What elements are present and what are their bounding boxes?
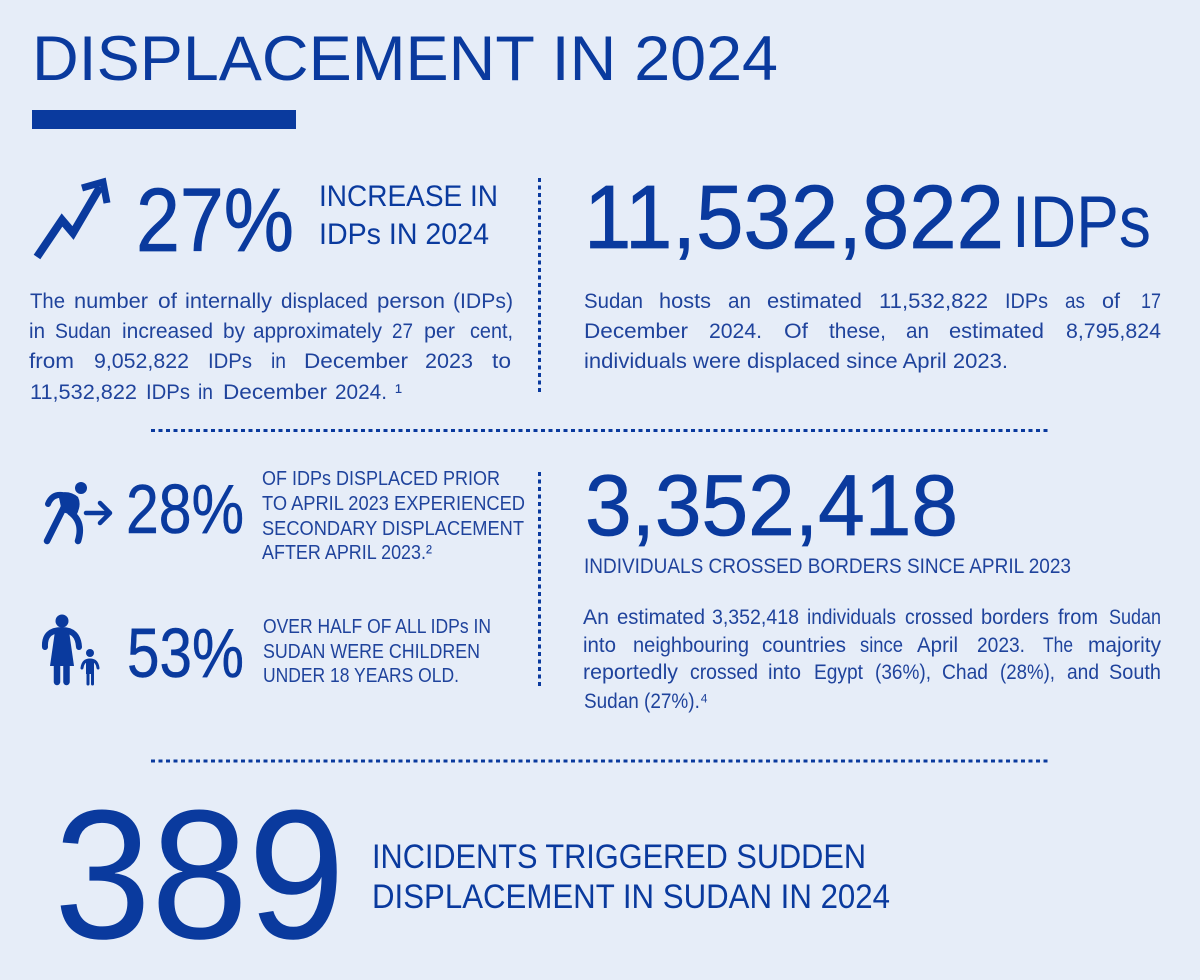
panel: border crossings bbox=[583, 458, 1161, 713]
text block: IDP increase: 27 bbox=[392, 320, 413, 343]
text block: IDP increase: ¹ bbox=[395, 381, 402, 404]
stat label: TO APRIL 2023 EXPERIENCED bbox=[262, 493, 525, 515]
text block: IDPs hosted: 8,795,824 bbox=[1066, 320, 1161, 343]
text block: IDP increase: in bbox=[271, 350, 286, 373]
panel: 53% children bbox=[45, 614, 491, 692]
text block: IDP increase: by bbox=[223, 320, 245, 343]
stat label: UNDER 18 YEARS OLD. bbox=[263, 665, 459, 687]
text block: IDP increase: number bbox=[74, 290, 148, 313]
stat: 53%: 53% bbox=[127, 614, 244, 692]
text block: border crossings: The bbox=[1043, 634, 1073, 657]
stat label: DISPLACEMENT IN SUDAN IN 2024 bbox=[372, 878, 890, 916]
stat label: IDPs IN 2024 bbox=[319, 218, 489, 251]
text block: IDPs hosted: individuals were displaced since April 2023. bbox=[584, 350, 1008, 373]
stat: 27%: 27% bbox=[136, 171, 294, 271]
text block: IDPs hosted: an bbox=[728, 290, 751, 313]
stat: 389: 389 bbox=[54, 771, 345, 977]
text block: IDP increase: 2023 bbox=[425, 350, 473, 373]
stat label: AFTER APRIL 2023.² bbox=[262, 542, 432, 564]
text block: IDP increase: December bbox=[223, 381, 327, 404]
text block: border crossings: estimated bbox=[617, 606, 705, 629]
icon: rising arrow bbox=[37, 182, 107, 257]
stat label bbox=[372, 838, 890, 916]
text block: border crossings: majority bbox=[1088, 634, 1161, 657]
text block: border crossings: individuals bbox=[807, 606, 896, 629]
text block: IDPs hosted: an bbox=[906, 320, 929, 343]
text block: IDP increase: in bbox=[198, 381, 213, 404]
panel: incidents bbox=[54, 771, 890, 977]
text block: IDPs hosted: 11,532,822 bbox=[879, 290, 988, 313]
text block: IDPs hosted: IDPs bbox=[1005, 290, 1048, 313]
text block: IDP increase bbox=[29, 290, 513, 404]
stat label bbox=[263, 616, 491, 687]
text block: IDPs hosted: estimated bbox=[949, 320, 1044, 343]
text block: border crossings: from bbox=[1058, 606, 1098, 629]
stat unit: IDPs: IDPs bbox=[1012, 182, 1151, 263]
text block: IDPs hosted bbox=[584, 290, 1161, 373]
text block: border crossings: into bbox=[583, 634, 616, 657]
stat label: INDIVIDUALS CROSSED BORDERS SINCE APRIL 2023 bbox=[584, 555, 1071, 578]
text block: IDP increase: to bbox=[492, 350, 511, 373]
text block: IDPs hosted: Of bbox=[784, 320, 808, 343]
text block: IDP increase: per bbox=[424, 320, 455, 343]
stat label: SECONDARY DISPLACEMENT bbox=[262, 518, 524, 540]
stat: 28%: 28% bbox=[126, 470, 244, 548]
text block: IDP increase: Sudan bbox=[55, 320, 111, 343]
text block: IDPs hosted: hosts bbox=[659, 290, 711, 313]
panel: 28% secondary displacement bbox=[47, 468, 525, 564]
text block: border crossings: crossed bbox=[690, 661, 758, 684]
text block: IDPs hosted: estimated bbox=[767, 290, 862, 313]
text block: border crossings bbox=[583, 606, 1161, 713]
text block: IDPs hosted: 17 bbox=[1141, 290, 1161, 313]
stat label: INCREASE IN bbox=[319, 180, 498, 213]
text block: border crossings: (36%), bbox=[875, 661, 931, 684]
stat label bbox=[262, 468, 525, 564]
text block: border crossings: borders bbox=[981, 606, 1049, 629]
stat: 3,352,418: 3,352,418 bbox=[585, 458, 958, 554]
text block: IDP increase: in bbox=[29, 320, 45, 343]
text block: border crossings: reportedly bbox=[583, 661, 679, 684]
panel: 27% increase bbox=[29, 171, 513, 404]
text block: IDP increase: IDPs bbox=[146, 381, 190, 404]
text block: IDPs hosted: of bbox=[1102, 290, 1120, 313]
text block: IDP increase: IDPs bbox=[208, 350, 252, 373]
text block: IDP increase: December bbox=[304, 350, 408, 373]
icon: adult and child bbox=[45, 614, 98, 684]
text block: border crossings: 2023. bbox=[977, 634, 1025, 657]
stat label bbox=[319, 180, 498, 251]
text block: border crossings: Chad bbox=[942, 661, 988, 684]
text block: border crossings: countries bbox=[762, 634, 846, 657]
text block: IDP increase: 9,052,822 bbox=[94, 350, 189, 373]
text block: IDPs hosted: December bbox=[584, 320, 688, 343]
text block: IDPs hosted: these, bbox=[829, 320, 886, 343]
text block: IDP increase: person bbox=[377, 290, 445, 313]
text block: IDP increase: 2024. bbox=[335, 381, 387, 404]
text block: IDP increase: cent, bbox=[470, 320, 513, 343]
icon: running person with arrow bbox=[47, 482, 110, 541]
text block: IDP increase: displaced bbox=[281, 290, 368, 313]
text block: IDP increase: internally bbox=[185, 290, 273, 313]
text block: border crossings: crossed bbox=[905, 606, 973, 629]
text block: border crossings: since bbox=[860, 634, 903, 657]
text block: IDP increase: of bbox=[158, 290, 177, 313]
vertical divider top bbox=[538, 178, 541, 392]
horizontal divider 1 bbox=[151, 429, 1049, 432]
text block: IDP increase: approximately bbox=[253, 320, 382, 343]
stat label: INCIDENTS TRIGGERED SUDDEN bbox=[372, 838, 866, 876]
text block: IDP increase: from bbox=[29, 350, 74, 373]
vertical divider middle bbox=[538, 472, 541, 688]
text block: IDPs hosted: as bbox=[1065, 290, 1085, 313]
stat label: OF IDPs DISPLACED PRIOR bbox=[262, 468, 500, 490]
text block: IDP increase: (IDPs) bbox=[453, 290, 513, 313]
text block: border crossings: and bbox=[1067, 661, 1099, 684]
horizontal divider 2 bbox=[151, 760, 1049, 762]
text block: border crossings: South bbox=[1109, 661, 1161, 684]
text block: IDPs hosted: Sudan bbox=[584, 290, 643, 313]
text block: border crossings: April bbox=[917, 634, 958, 657]
title: DISPLACEMENT IN 2024 bbox=[32, 24, 778, 94]
text block: border crossings: into bbox=[768, 661, 801, 684]
text block: border crossings: Sudan bbox=[1109, 606, 1161, 629]
text block: IDP increase: increased bbox=[122, 320, 213, 343]
panel: total IDPs bbox=[584, 168, 1161, 373]
text block: border crossings: neighbouring bbox=[633, 634, 749, 657]
text block: border crossings: Sudan (27%).⁴ bbox=[584, 690, 708, 713]
text block: IDPs hosted: 2024. bbox=[709, 320, 762, 343]
text block: border crossings: (28%), bbox=[1000, 661, 1055, 684]
stat: 11,532,822: 11,532,822 bbox=[584, 168, 1004, 268]
text block: border crossings: Egypt bbox=[814, 661, 863, 684]
stat label: OVER HALF OF ALL IDPs IN bbox=[263, 616, 491, 638]
text block: IDP increase: 11,532,822 bbox=[30, 381, 137, 404]
text block: border crossings: An bbox=[583, 606, 609, 629]
text block: border crossings: 3,352,418 bbox=[712, 606, 799, 629]
title underline bar bbox=[32, 110, 296, 129]
text block: IDP increase: The bbox=[30, 290, 65, 313]
stat label: SUDAN WERE CHILDREN bbox=[263, 641, 480, 663]
